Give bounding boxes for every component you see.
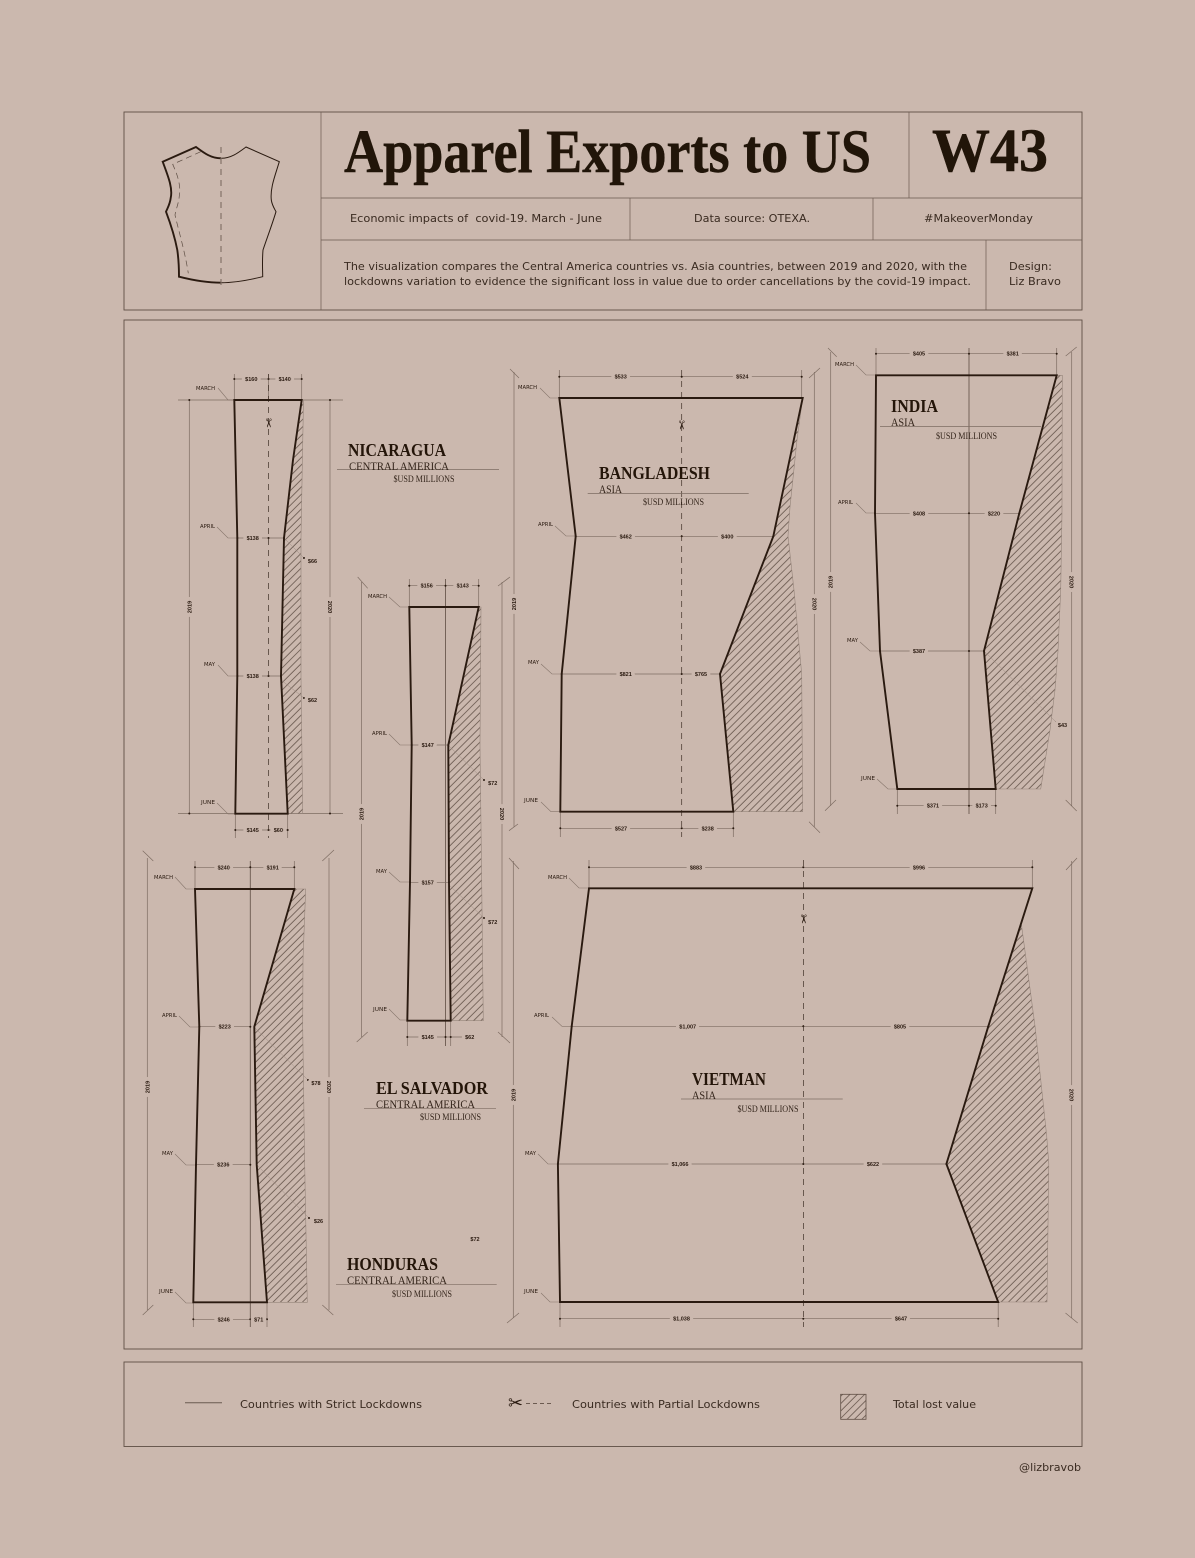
value labels: $223 <box>219 1025 231 1031</box>
heading: El Salvador <box>364 1078 496 1122</box>
value labels: $533 <box>615 375 627 381</box>
silhouette <box>875 375 1057 789</box>
value labels: $371 <box>927 804 939 810</box>
month labels: MARCH <box>548 875 567 881</box>
legend: partial lockdowns: Countries with Partial Lockdowns <box>572 1398 760 1411</box>
value labels <box>829 352 1074 810</box>
value labels: $1,007 <box>679 1024 696 1030</box>
value labels: 2020 <box>325 1081 331 1093</box>
chart: Nicaragua <box>178 374 499 838</box>
value labels: $145 <box>247 828 259 834</box>
value labels: $173 <box>976 804 988 810</box>
lost value hatch <box>720 398 803 812</box>
value labels: $157 <box>422 880 434 886</box>
week label: W43 <box>932 118 1048 185</box>
value labels: $524 <box>736 375 749 381</box>
value labels: 2019 <box>360 808 366 820</box>
month labels: MAY <box>847 638 858 644</box>
heading: Bangladesh: $USD MILLIONS <box>643 497 704 507</box>
value labels: 2020 <box>498 808 504 820</box>
value labels: $26 <box>314 1219 323 1225</box>
design credit: Design: <box>1009 260 1052 273</box>
lost value hatch <box>946 925 1049 1302</box>
description: lockdowns variation to evidence the significant loss in value due to order cancellations by the covid-19 impact. <box>344 275 971 288</box>
value labels: $408 <box>913 511 925 517</box>
value labels: $238 <box>702 826 714 832</box>
value labels: 2019 <box>187 601 193 613</box>
value labels: $387 <box>913 649 925 655</box>
value labels: 2020 <box>1068 1089 1074 1101</box>
value labels <box>187 377 332 834</box>
month labels: JUNE <box>372 1007 387 1013</box>
month labels: APRIL <box>838 500 853 506</box>
value labels: $72 <box>488 781 497 787</box>
silhouette <box>234 400 302 814</box>
value labels: $145 <box>422 1035 434 1041</box>
value labels: $156 <box>421 584 433 590</box>
month labels: JUNE <box>523 798 538 804</box>
header panel <box>124 112 1082 310</box>
month labels <box>196 386 215 806</box>
chart: Vietnam <box>507 858 1078 1327</box>
silhouette <box>407 607 479 1021</box>
heading: Bangladesh <box>588 463 749 507</box>
value labels: $72 <box>488 920 497 926</box>
value labels: $240 <box>218 865 230 871</box>
value labels: $462 <box>620 534 632 540</box>
value labels: $66 <box>308 559 317 565</box>
value labels: 2019 <box>829 576 835 588</box>
month labels: JUNE <box>158 1289 173 1295</box>
month labels: APRIL <box>538 522 553 528</box>
month labels: MAY <box>525 1151 536 1157</box>
value labels: 2020 <box>326 601 332 613</box>
heading: El Salvador: CENTRAL AMERICA <box>376 1097 475 1111</box>
value labels: $405 <box>913 352 925 358</box>
value labels: 2020 <box>1068 576 1074 588</box>
heading: Vietnam: ASIA <box>692 1088 716 1102</box>
value labels: $220 <box>988 511 1000 517</box>
heading: Honduras <box>336 1254 497 1299</box>
lost value hatch <box>254 889 307 1302</box>
value labels: 2019 <box>145 1081 151 1093</box>
chart: El Salvador <box>357 577 510 1122</box>
data source: Data source: OTEXA. <box>694 212 810 225</box>
value labels: $1,038 <box>673 1317 690 1323</box>
value labels: $140 <box>279 377 291 383</box>
value labels: $381 <box>1007 352 1019 358</box>
heading: Vietnam: $USD MILLIONS <box>738 1104 798 1114</box>
value labels: $647 <box>895 1317 907 1323</box>
month labels <box>368 594 387 1013</box>
value labels: $60 <box>274 828 283 834</box>
value labels: $191 <box>267 865 279 871</box>
chart: Honduras <box>143 850 497 1327</box>
month labels: JUNE <box>860 776 875 782</box>
heading: Vietnam: VIETMAN <box>692 1069 766 1089</box>
month labels: MARCH <box>835 362 854 368</box>
lost value hatch <box>281 400 304 814</box>
heading: El Salvador: $USD MILLIONS <box>420 1112 481 1122</box>
heading: Honduras: $USD MILLIONS <box>392 1289 452 1299</box>
month labels: APRIL <box>534 1013 549 1019</box>
heading: Nicaragua: CENTRAL AMERICA <box>349 459 449 473</box>
panel: garment charts <box>124 320 1082 1349</box>
month labels: JUNE <box>523 1289 538 1295</box>
month labels: JUNE <box>200 800 215 806</box>
heading: Bangladesh: BANGLADESH <box>599 463 710 483</box>
value labels: $400 <box>721 534 733 540</box>
lost value hatch <box>984 375 1062 789</box>
silhouette <box>558 888 1032 1302</box>
value labels: $72 <box>470 1237 480 1243</box>
value labels: $805 <box>894 1024 906 1030</box>
value labels <box>511 865 1074 1323</box>
value labels: 2019 <box>511 1089 517 1101</box>
heading: Nicaragua <box>337 440 499 484</box>
heading: Nicaragua: NICARAGUA <box>348 440 446 460</box>
value labels: $71 <box>254 1317 263 1323</box>
value labels: $622 <box>867 1162 879 1168</box>
description: The visualization compares the Central America countries vs. Asia countries, between 2019 and 2020, with the <box>343 260 967 273</box>
silhouette <box>193 889 294 1302</box>
month labels: MAY <box>528 660 539 666</box>
heading: India: ASIA <box>891 415 915 429</box>
month labels: MARCH <box>154 875 173 881</box>
value labels: $62 <box>308 698 317 704</box>
heading: Vietnam <box>681 1069 843 1114</box>
month labels: MARCH <box>368 594 387 600</box>
legend: total lost value <box>841 1394 976 1419</box>
legend: partial lockdowns: ✂ <box>508 1393 523 1414</box>
value labels: $246 <box>218 1317 230 1323</box>
month labels <box>835 362 875 782</box>
legend: strict lockdowns: Countries with Strict Lockdowns <box>240 1398 422 1411</box>
subtitle: Economic impacts of covid-19. March - June <box>350 212 602 225</box>
month labels: APRIL <box>372 731 387 737</box>
month labels: APRIL <box>162 1013 177 1019</box>
month labels: MAY <box>376 869 387 875</box>
value labels: $62 <box>465 1035 474 1041</box>
legend: total lost value: Total lost value <box>892 1398 976 1411</box>
value labels: $1,066 <box>672 1162 688 1168</box>
heading: Bangladesh: ASIA <box>599 482 622 496</box>
month labels <box>154 875 177 1295</box>
silhouette <box>559 398 803 812</box>
month labels <box>518 385 553 804</box>
value labels: $143 <box>457 584 469 590</box>
scissors: ✂ <box>674 420 688 430</box>
value labels: 2019 <box>512 598 518 610</box>
value labels: $527 <box>615 826 627 832</box>
month labels: APRIL <box>200 524 215 530</box>
value labels: $996 <box>913 865 925 871</box>
icon: garment pattern top <box>163 147 279 290</box>
value labels <box>145 865 480 1323</box>
value labels <box>512 375 816 832</box>
heading: Nicaragua: $USD MILLIONS <box>394 474 454 484</box>
value labels: $236 <box>217 1163 229 1169</box>
value labels: $821 <box>620 672 632 678</box>
value labels: $138 <box>247 674 259 680</box>
value labels: $765 <box>695 672 707 678</box>
value labels: $138 <box>247 536 259 542</box>
title: Apparel Exports to US <box>344 119 871 186</box>
month labels <box>523 875 567 1295</box>
heading: Honduras: HONDURAS <box>347 1254 438 1274</box>
month labels: MARCH <box>518 385 537 391</box>
legend: partial lockdowns <box>508 1393 760 1414</box>
value labels: $147 <box>422 743 434 749</box>
heading: India: INDIA <box>891 396 938 416</box>
month labels: MAY <box>204 662 215 668</box>
value labels: $160 <box>245 377 257 383</box>
legend panel <box>124 1362 1082 1446</box>
month labels: MARCH <box>196 386 215 392</box>
lost value hatch <box>448 607 483 1021</box>
value labels: 2020 <box>810 598 816 610</box>
chart: Bangladesh <box>509 368 820 837</box>
heading: Honduras: CENTRAL AMERICA <box>347 1273 447 1287</box>
chart: India <box>825 347 1077 814</box>
value labels: $43 <box>1058 723 1067 729</box>
author handle: @lizbravob <box>1019 1461 1081 1474</box>
heading: India: $USD MILLIONS <box>936 431 997 441</box>
value labels: $78 <box>311 1081 321 1087</box>
design credit: Liz Bravo <box>1009 275 1061 288</box>
scissors: ✂ <box>796 914 810 924</box>
heading: El Salvador: EL SALVADOR <box>376 1078 489 1098</box>
scissors: ✂ <box>262 418 276 428</box>
hashtag: #MakeoverMonday <box>924 212 1033 225</box>
value labels <box>360 584 504 1041</box>
month labels: MAY <box>162 1151 173 1157</box>
value labels: $883 <box>690 865 702 871</box>
heading: India <box>880 396 1041 441</box>
